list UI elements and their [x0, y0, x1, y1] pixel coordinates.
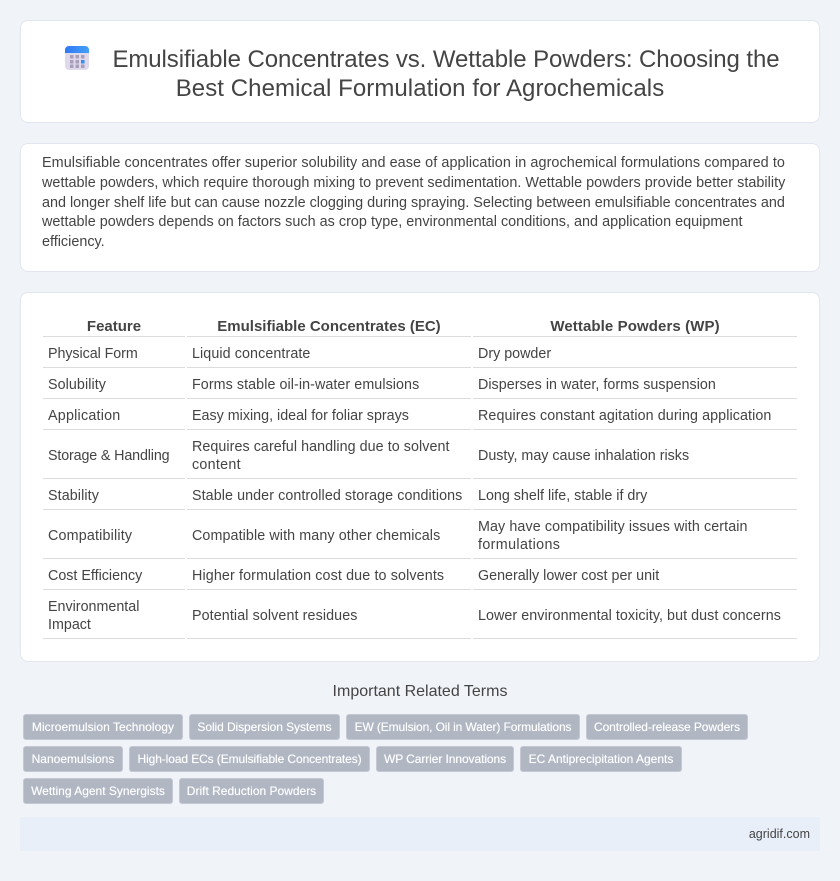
row: physical form: Physical Form: [48, 346, 138, 362]
row: compatibility: May have compatibility issues with certain: [478, 519, 748, 535]
row: compatibility: formulations: [478, 537, 560, 553]
tags: EC Antiprecipitation Agents: [529, 752, 673, 766]
tags: [23, 714, 748, 804]
row: solubility: Disperses in water, forms suspension: [478, 377, 716, 393]
row: environmental impact: Impact: [48, 617, 91, 633]
tags: Drift Reduction Powders: [187, 784, 316, 798]
tags: Controlled-release Powders: [594, 720, 740, 734]
footer source: agridif.com: [749, 827, 810, 841]
row: stability: Stable under controlled storage conditions: [192, 488, 462, 504]
comparison table panel: [20, 292, 820, 662]
row: physical form: Dry powder: [478, 346, 551, 362]
row: application: [48, 408, 771, 424]
footer bar: [20, 817, 820, 851]
row: solubility: Solubility: [48, 377, 106, 393]
row: cost efficiency: [48, 568, 660, 584]
title: Best Chemical Formulation for Agrochemicals: [176, 75, 664, 102]
column header: wettable powders: Wettable Powders (WP): [550, 318, 720, 335]
row: storage and handling: Dusty, may cause inhalation risks: [478, 448, 689, 464]
row: storage and handling: content: [192, 457, 241, 473]
row: compatibility: Compatibility: [48, 528, 132, 544]
row: stability: Long shelf life, stable if dry: [478, 488, 647, 504]
intro text: [42, 155, 786, 250]
intro text: and longer shelf life but can cause nozzle clogging during spraying. Selecting between emulsifiable concentrates and: [42, 195, 785, 211]
row: environmental impact: Lower environmental toxicity, but dust concerns: [478, 608, 781, 624]
tags: Nanoemulsions: [32, 752, 114, 766]
row: environmental impact: [48, 599, 781, 633]
intro text: wettable powders depends on factors such as crop type, environmental conditions, and application equipment: [42, 214, 742, 230]
intro text: Emulsifiable concentrates offer superior solubility and ease of application in agrochemical formulations compared to: [42, 155, 785, 171]
icon: calendar: [65, 46, 89, 70]
title: [112, 46, 780, 102]
row: environmental impact: Environmental: [48, 599, 139, 615]
header panel: [20, 20, 820, 123]
row: solubility: [48, 377, 716, 393]
tags: High-load ECs (Emulsifiable Concentrates): [138, 752, 362, 766]
related terms heading: Important Related Terms: [333, 683, 507, 700]
row: physical form: [48, 346, 551, 362]
row: cost efficiency: Cost Efficiency: [48, 568, 142, 584]
row: storage and handling: Storage & Handling: [48, 448, 169, 464]
row: stability: Stability: [48, 488, 99, 504]
row: cost efficiency: Generally lower cost per unit: [478, 568, 659, 584]
tags: Microemulsion Technology: [32, 720, 174, 734]
tags: Solid Dispersion Systems: [197, 720, 332, 734]
column header: feature: Feature: [87, 318, 141, 335]
row: solubility: Forms stable oil-in-water emulsions: [192, 377, 419, 393]
tags: WP Carrier Innovations: [384, 752, 506, 766]
row: storage and handling: [48, 439, 689, 473]
row: application: Application: [48, 408, 120, 424]
tags: Wetting Agent Synergists: [31, 784, 165, 798]
comparison table: [43, 318, 797, 639]
intro panel: [20, 143, 820, 272]
row: physical form: Liquid concentrate: [192, 346, 310, 362]
row: compatibility: Compatible with many other chemicals: [192, 528, 440, 544]
row: stability: [48, 488, 648, 504]
column header: emulsifiable concentrates: Emulsifiable Concentrates (EC): [217, 318, 441, 335]
intro text: efficiency.: [42, 234, 105, 250]
row: cost efficiency: Higher formulation cost due to solvents: [192, 568, 444, 584]
tags: EW (Emulsion, Oil in Water) Formulations: [355, 720, 571, 734]
row: compatibility: [48, 519, 748, 553]
intro text: wettable powders, which require thorough mixing to prevent sedimentation. Wettable powders provide better stability: [42, 175, 785, 191]
title: Emulsifiable Concentrates vs. Wettable Powders: Choosing the: [112, 46, 780, 73]
row: storage and handling: Requires careful handling due to solvent: [192, 439, 450, 455]
row: environmental impact: Potential solvent residues: [192, 608, 358, 624]
row: application: Requires constant agitation during application: [478, 408, 771, 424]
row: application: Easy mixing, ideal for foliar sprays: [192, 408, 409, 424]
